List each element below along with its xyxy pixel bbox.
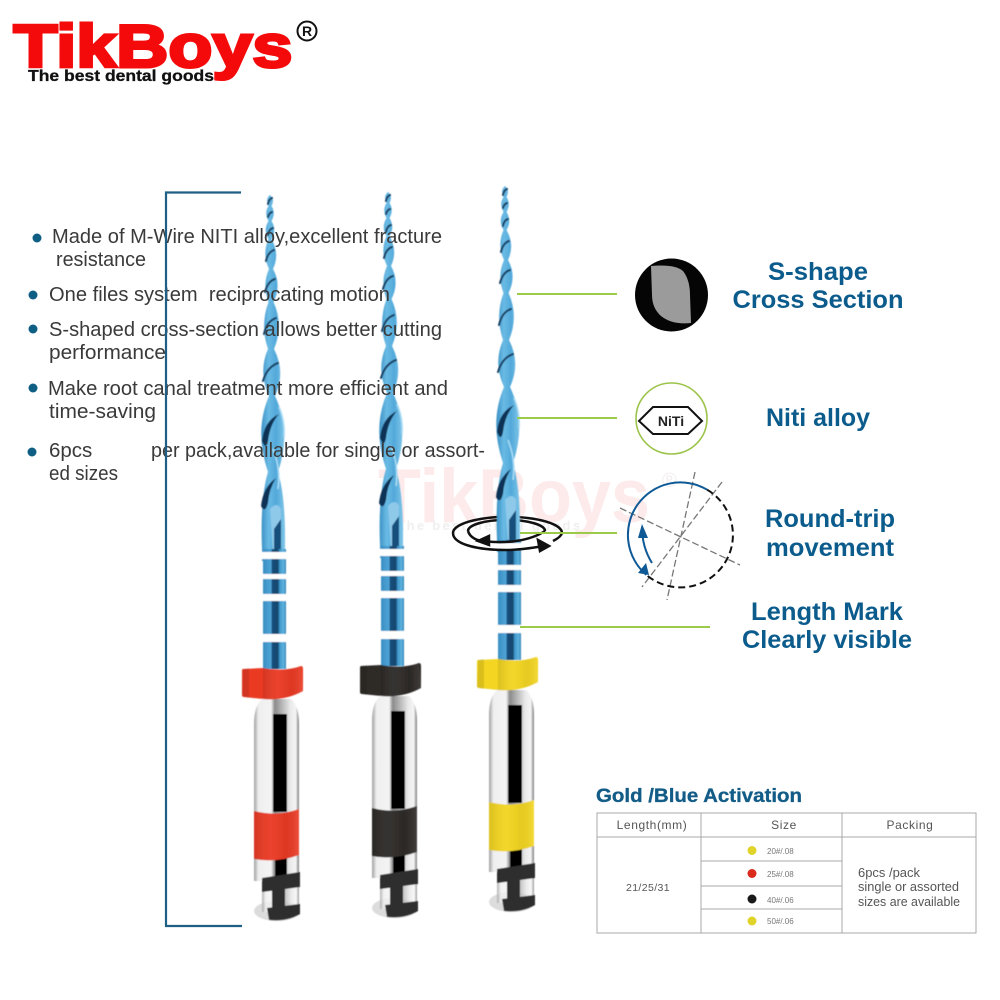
size rows: 20#/.08 bbox=[767, 847, 794, 856]
file with black stopper bbox=[360, 192, 421, 918]
bullet 4: Make root canal treatment more efficient and bbox=[48, 377, 448, 400]
file with red stopper bbox=[242, 195, 303, 921]
watermark: ® bbox=[662, 470, 677, 492]
icon: round-trip movement bbox=[620, 472, 740, 600]
packing note: single or assorted bbox=[858, 879, 959, 894]
specification table bbox=[597, 813, 976, 933]
table header: Length(mm) bbox=[617, 818, 687, 832]
size rows: 50#/.06 bbox=[767, 917, 794, 926]
bullet 1 bbox=[32, 225, 442, 271]
label: round-trip movement bbox=[765, 505, 895, 562]
feature list bbox=[28, 225, 485, 485]
registered mark: R bbox=[302, 23, 312, 39]
bracket bbox=[166, 192, 242, 926]
label: S-shape cross section bbox=[732, 258, 904, 314]
bullet 1: resistance bbox=[56, 248, 146, 271]
packing note: 6pcs /pack bbox=[858, 865, 920, 880]
bullet 5: 6pcs bbox=[49, 439, 92, 462]
callout lines bbox=[517, 294, 710, 627]
table heading: Gold /Blue Activation bbox=[596, 786, 802, 807]
bullet 5 bbox=[28, 439, 485, 485]
bullet 2: One files system reciprocating motion bbox=[49, 283, 390, 306]
size rows: 40#/.06 bbox=[767, 896, 794, 905]
icon: NiTi alloy: NiTi bbox=[658, 413, 684, 429]
label: length mark bbox=[742, 598, 912, 654]
rotation rings, back bbox=[453, 517, 562, 533]
watermark: TikBoys bbox=[378, 454, 650, 539]
file with yellow stopper bbox=[477, 186, 538, 912]
logo wordmark: TikBoys bbox=[14, 13, 292, 80]
bullet 3: performance bbox=[49, 341, 166, 364]
label: round-trip movement: Round-trip bbox=[765, 505, 895, 533]
bullet 3 bbox=[28, 318, 442, 364]
label: S-shape cross section: S-shape bbox=[768, 258, 868, 286]
size rows: 25#/.08 bbox=[767, 870, 794, 879]
table header: Packing bbox=[887, 818, 933, 832]
table grid bbox=[597, 813, 976, 933]
packing note: sizes are available bbox=[858, 894, 960, 909]
table header bbox=[617, 818, 933, 832]
watermark: the best dental goods bbox=[400, 518, 580, 533]
table header: Size bbox=[771, 818, 797, 832]
label: S-shape cross section: Cross Section bbox=[732, 286, 904, 314]
logo bbox=[14, 13, 316, 85]
bullet 4 bbox=[28, 377, 448, 423]
bullet 5: per pack,available for single or assort- bbox=[151, 439, 485, 462]
bullet 5: ed sizes bbox=[49, 462, 118, 485]
length value: 21/25/31 bbox=[626, 882, 670, 894]
registered mark bbox=[298, 22, 316, 40]
label: NiTi alloy: Niti alloy bbox=[766, 404, 870, 432]
bullet 1: Made of M-Wire NITI alloy,excellent fracture bbox=[52, 225, 442, 248]
packing note bbox=[858, 865, 960, 909]
icon: NiTi alloy bbox=[636, 383, 707, 454]
size rows bbox=[748, 846, 794, 926]
rotation rings, front with arrows bbox=[453, 531, 562, 551]
bullet 4: time-saving bbox=[49, 400, 156, 423]
label: length mark: Clearly visible bbox=[742, 626, 912, 654]
bullet 3: S-shaped cross-section allows better cutting bbox=[49, 318, 442, 341]
label: length mark: Length Mark bbox=[751, 598, 903, 626]
icon: S-shape cross section bbox=[635, 258, 708, 332]
label: round-trip movement: movement bbox=[766, 534, 895, 562]
logo tagline: The best dental goods bbox=[28, 68, 214, 85]
